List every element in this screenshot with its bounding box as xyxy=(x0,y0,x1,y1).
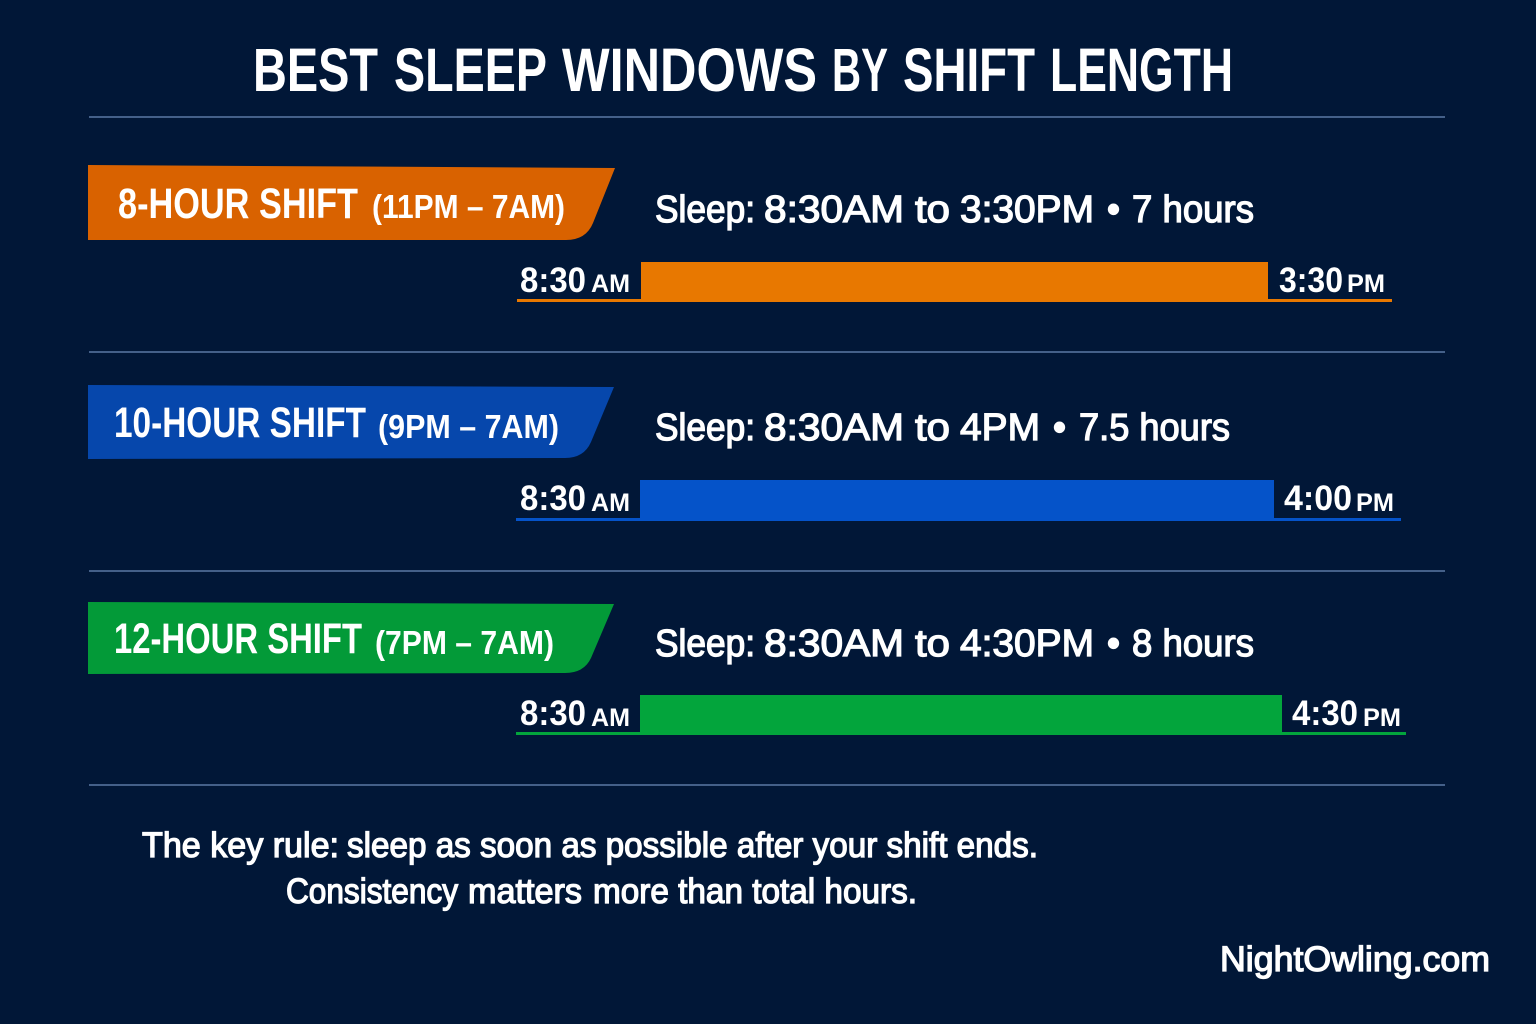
title xyxy=(253,36,1233,104)
banner: 12-hour shift: (7PM – 7AM) xyxy=(375,624,554,661)
sleep window text: 10-hour shift xyxy=(655,407,1230,449)
timeline bar: 8:30 AM to 4:00 PM: PM xyxy=(1356,489,1394,517)
timeline bar: 8:30 AM to 3:30 PM: PM xyxy=(1347,270,1385,298)
key rule note: matters xyxy=(468,872,582,911)
sleep window text: 8-hour shift: 7 hours xyxy=(1132,189,1254,231)
timeline bar: 8:30 AM to 4:30 PM: 8:30 xyxy=(520,694,586,733)
banner: 8-hour shift: (11PM – 7AM) xyxy=(372,188,565,225)
banner: 10-hour shift: (9PM – 7AM) xyxy=(378,408,559,445)
key rule note: Consistency xyxy=(286,872,458,911)
key rule note: The key rule: xyxy=(142,826,339,865)
panel: 12-hour shift xyxy=(88,602,1406,735)
banner: 10-hour shift xyxy=(88,385,614,459)
sleep window text: 8-hour shift: Sleep: xyxy=(655,189,755,231)
timeline bar: 8:30 AM to 3:30 PM: 3:30 xyxy=(1279,261,1343,300)
banner: 12-hour shift: 12-HOUR SHIFT xyxy=(114,615,362,663)
key rule note xyxy=(142,826,1038,911)
sleep window text: 8-hour shift xyxy=(655,189,1254,231)
sleep window text: 12-hour shift: • xyxy=(1107,623,1120,665)
timeline bar: 8:30 AM to 3:30 PM xyxy=(517,261,1392,302)
title: LENGTH xyxy=(1050,36,1233,104)
key rule note: more than total hours. xyxy=(593,872,917,911)
timeline bar: 8:30 AM to 4:30 PM: 4:30 xyxy=(1292,694,1358,733)
key rule note: sleep as soon as possible after your shift ends. xyxy=(347,826,1038,865)
sleep window text: 8-hour shift: to xyxy=(915,189,950,231)
timeline bar: 8:30 AM to 4:30 PM: PM xyxy=(1363,704,1401,732)
sleep window text: 12-hour shift: 4:30PM xyxy=(960,623,1094,665)
sleep window text: 10-hour shift: Sleep: xyxy=(655,407,755,449)
banner: 12-hour shift xyxy=(88,602,614,674)
sleep window text: 12-hour shift xyxy=(655,623,1254,665)
title: SHIFT xyxy=(903,36,1035,104)
title: WINDOWS xyxy=(562,36,817,104)
sleep window text: 10-hour shift: • xyxy=(1053,407,1066,449)
timeline bar: 8:30 AM to 4:30 PM: AM xyxy=(591,704,630,732)
title: SLEEP xyxy=(394,36,547,104)
panel: 10-hour shift xyxy=(88,385,1401,521)
sleep window text: 12-hour shift: to xyxy=(915,623,950,665)
sleep window text: 8-hour shift: 3:30PM xyxy=(960,189,1094,231)
sleep window text: 10-hour shift: to xyxy=(915,407,950,449)
brand: NightOwling.com: NightOwling.com xyxy=(1220,940,1490,979)
timeline bar: 8:30 AM to 4:00 PM: AM xyxy=(591,489,630,517)
title: BEST xyxy=(253,36,378,104)
sleep window text: 12-hour shift: 8:30AM xyxy=(764,623,904,665)
sleep window text: 10-hour shift: 7.5 hours xyxy=(1079,407,1230,449)
banner: 8-hour shift: 8-HOUR SHIFT xyxy=(118,180,358,228)
timeline bar: 8:30 AM to 3:30 PM: AM xyxy=(591,270,630,298)
timeline bar: 8:30 AM to 3:30 PM: 8:30 xyxy=(520,261,586,300)
panel: 8-hour shift xyxy=(88,165,1392,302)
sleep window text: 10-hour shift: 8:30AM xyxy=(764,407,904,449)
sleep window text: 10-hour shift: 4PM xyxy=(960,407,1040,449)
sleep window text: 12-hour shift: 8 hours xyxy=(1132,623,1254,665)
sleep window text: 8-hour shift: 8:30AM xyxy=(764,189,904,231)
banner: 10-hour shift: 10-HOUR SHIFT xyxy=(114,399,366,447)
title: BY xyxy=(832,36,888,104)
sleep window text: 8-hour shift: • xyxy=(1107,189,1120,231)
timeline bar: 8:30 AM to 4:00 PM: 4:00 xyxy=(1284,479,1352,518)
timeline bar: 8:30 AM to 4:00 PM: 8:30 xyxy=(520,479,586,518)
timeline bar: 8:30 AM to 4:30 PM xyxy=(516,694,1406,735)
banner: 8-hour shift xyxy=(88,165,615,240)
sleep window text: 12-hour shift: Sleep: xyxy=(655,623,755,665)
timeline bar: 8:30 AM to 4:00 PM xyxy=(516,479,1401,521)
